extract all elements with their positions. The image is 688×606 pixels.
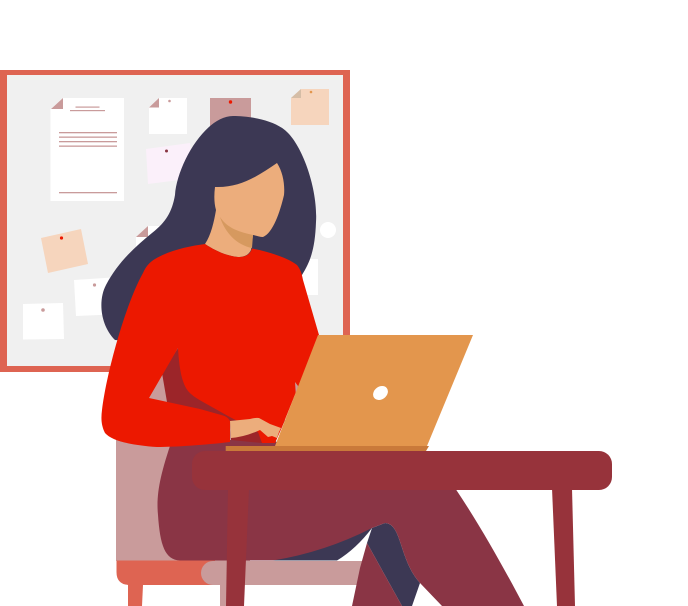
- peach note: [291, 89, 329, 125]
- chair: [116, 370, 372, 606]
- hair: [101, 116, 316, 350]
- dark thigh under trousers: [270, 528, 372, 560]
- tilted peach note: [41, 229, 88, 273]
- laptop logo: [370, 383, 391, 403]
- pink note: [210, 98, 251, 138]
- front lower leg: [352, 543, 402, 606]
- lilac note: [146, 143, 195, 184]
- neck and face: [205, 163, 284, 257]
- dark inner sleeve shadow: [162, 348, 285, 443]
- hand: [230, 418, 281, 438]
- table: [192, 451, 612, 606]
- note behind hair: [136, 226, 190, 262]
- white note right: [285, 259, 318, 295]
- laptop: [226, 335, 473, 451]
- trousers: [158, 440, 524, 606]
- sweater: [101, 244, 319, 447]
- white note tilted: [74, 277, 122, 316]
- chair seat: [116, 560, 215, 585]
- chair sliver beside torso: [295, 382, 298, 397]
- back leg in dark leggings: [367, 523, 420, 606]
- laptop base: [226, 446, 429, 451]
- white blob: [320, 222, 336, 238]
- table legs: [226, 488, 249, 606]
- white note lower left: [23, 303, 64, 340]
- chair legs: [128, 585, 228, 606]
- table top: [192, 451, 612, 490]
- document with fold: [50, 98, 124, 201]
- pinboard: [0, 70, 350, 372]
- small white note: [149, 98, 187, 134]
- neck shadow: [220, 217, 253, 248]
